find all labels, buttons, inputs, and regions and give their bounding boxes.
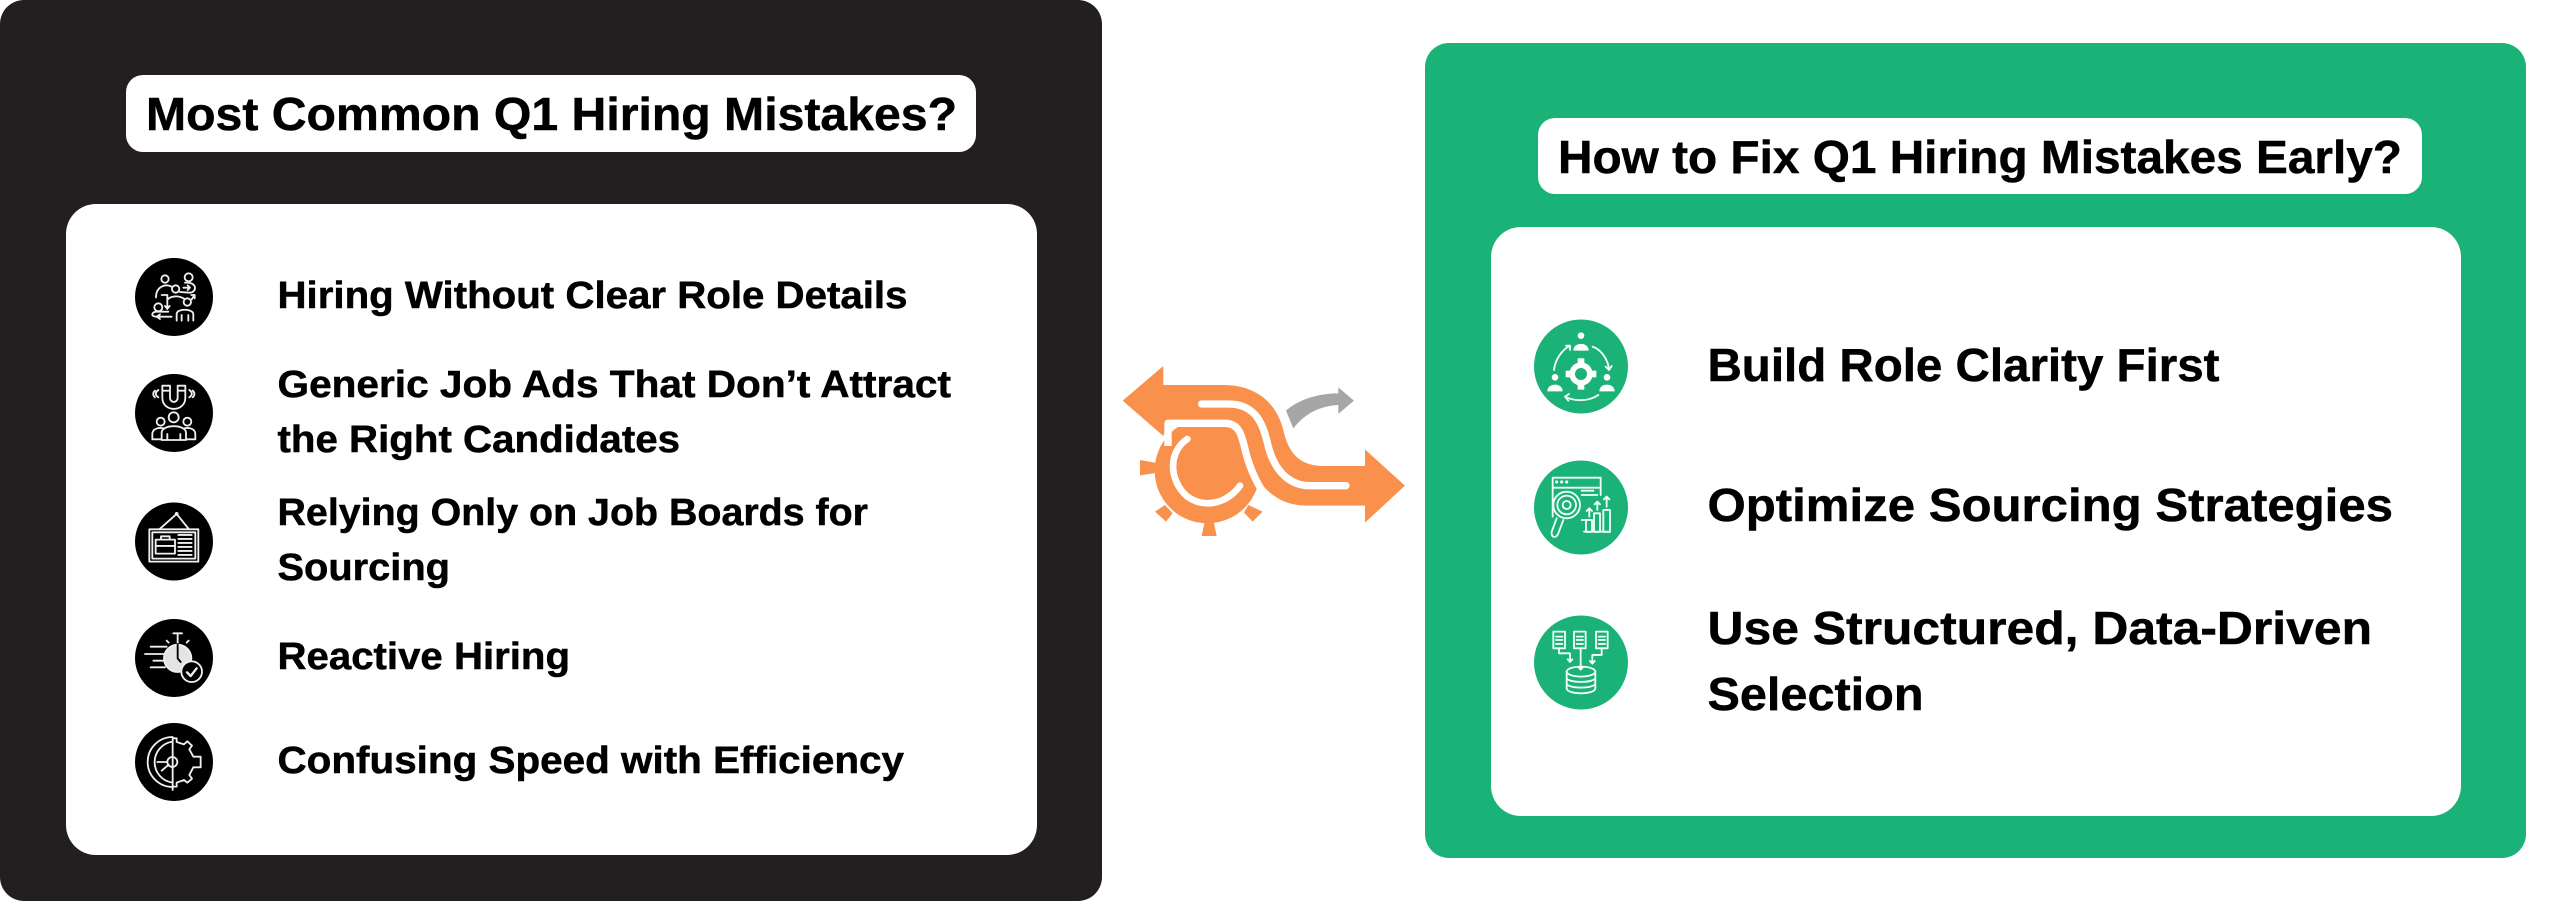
heading: most common mistakes (126, 75, 976, 152)
text: mistake 3: Relying Only on Job Boards for (278, 492, 868, 534)
icon: job board (135, 502, 213, 580)
icon: role clarity cycle (1534, 320, 1628, 414)
text: mistake 5: Confusing Speed with Efficiency (278, 740, 904, 782)
icon: team role flow (135, 258, 213, 336)
panel: how to fix (1425, 43, 2526, 858)
text: fix 3: Selection (1708, 668, 1924, 720)
icon: sourcing analytics (1534, 460, 1628, 554)
text: fix 2: Optimize Sourcing Strategies (1708, 479, 2393, 531)
icon: gear (1140, 418, 1263, 536)
card: mistakes list (66, 204, 1037, 855)
text: mistake 1: Hiring Without Clear Role Details (278, 275, 908, 317)
white channel lines (1168, 404, 1346, 503)
arrow: orange gear with diverging arrows (1123, 366, 1405, 536)
text: mistake 3 (278, 492, 868, 589)
text: mistake 2 (278, 364, 951, 461)
icon: magnet attracting people (135, 374, 213, 452)
arrow: left and right band (1123, 366, 1405, 523)
card: fixes list (1491, 227, 2461, 816)
text: mistake 4: Reactive Hiring (278, 636, 570, 678)
heading: most common mistakes: Most Common Q1 Hiring Mistakes? (146, 88, 957, 140)
heading: how to fix (1538, 118, 2422, 194)
text: mistake 3: Sourcing (278, 547, 450, 589)
panel: most common mistakes (0, 0, 1102, 901)
text: fix 1: Build Role Clarity First (1708, 339, 2220, 391)
text: fix 3: Use Structured, Data-Driven (1708, 602, 2372, 654)
heading: how to fix: How to Fix Q1 Hiring Mistakes Early? (1558, 131, 2402, 183)
icon: stopwatch with check (135, 619, 213, 697)
text: fix 3 (1708, 602, 2372, 720)
icon: documents into database (1534, 616, 1628, 710)
icon: half clock half gear (135, 723, 213, 801)
text: mistake 2: Generic Job Ads That Don’t Attract (278, 364, 951, 406)
arrow: grey curved (1286, 387, 1354, 428)
text: mistake 2: the Right Candidates (278, 419, 680, 461)
